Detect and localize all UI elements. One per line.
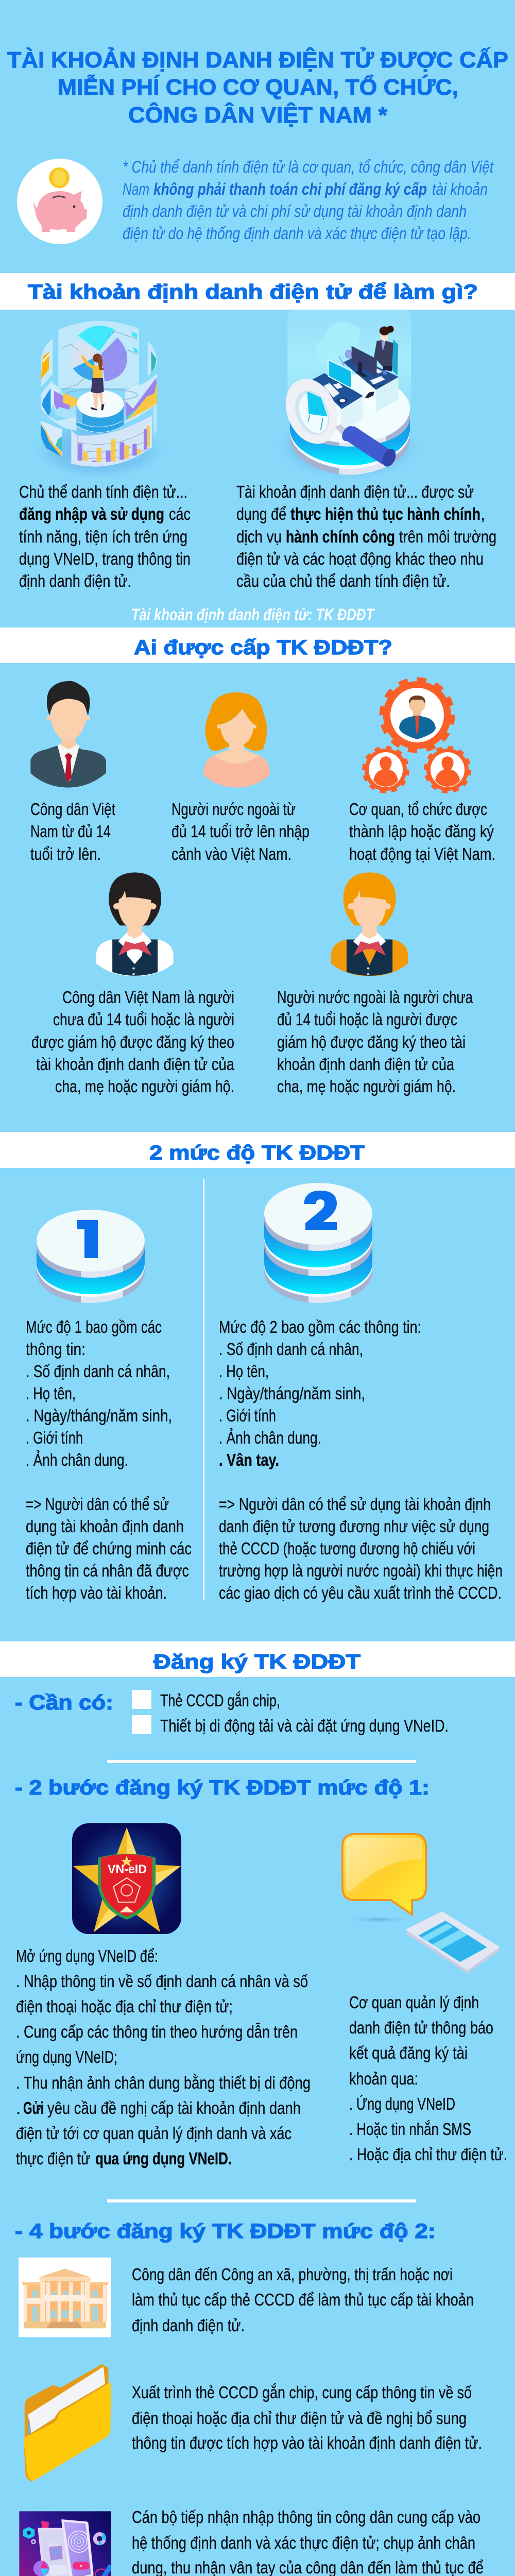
icon: level 1 disc [37, 1210, 145, 1303]
text: foreigners under 14 [277, 988, 473, 1096]
text: foreigners under 14: cha, mẹ hoặc người giám hộ. [277, 1077, 456, 1096]
text: level 1 [26, 1317, 192, 1602]
text: step 1 open app: ứng dụng VNeID; [16, 2047, 117, 2066]
text: citizens under 14: được giám hộ được đăng ký theo [31, 1032, 234, 1052]
text: citizens under 14: Công dân Việt Nam là người [62, 988, 234, 1007]
text: level 2: Mức độ 2 bao gồm các thông tin: [219, 1317, 421, 1336]
text: step 1 open app [16, 1946, 311, 2168]
text: step 2 notification: Cơ quan quản lý định [349, 1993, 479, 2012]
footnote text: không phải thanh toán chi phí đăng ký cấp [153, 180, 427, 198]
text: step 1 open app: Gửi [23, 2098, 44, 2117]
band heading: two levels: 2 mức độ TK ĐDĐT [149, 1142, 365, 1164]
text: level 1: . Ngày/tháng/năm sinh, [26, 1406, 172, 1425]
icon: VN-eID app: VN-eID [108, 1862, 147, 1876]
text: step 1 open app: Mở ứng dụng VNeID để: [16, 1946, 158, 1965]
text: step 2 notification: khoản qua: [349, 2069, 418, 2088]
footnote text: Nam [123, 180, 149, 198]
text: citizens over 14: Nam từ đủ 14 [30, 822, 111, 841]
title [7, 46, 508, 128]
text: level 1: . Họ tên, [26, 1384, 76, 1403]
text: step 1 visit police: định danh điện tử. [132, 2316, 245, 2335]
text: step 1 open app: điện thoại hoặc địa chỉ thư điện tử; [16, 1997, 233, 2016]
text: citizens under 14 [31, 988, 235, 1096]
band heading: what is it for: Tài khoản định danh điện tử để làm gì? [28, 281, 478, 303]
subheading: four steps: - 4 bước đăng ký TK ĐDĐT mức độ 2: [15, 2220, 436, 2243]
text: level 1: . Giới tính [26, 1428, 83, 1447]
band heading: two levels [0, 1132, 515, 1168]
text: step 1 open app: . [16, 2098, 21, 2117]
text: level 1: . Ảnh chân dung. [26, 1450, 128, 1469]
text: step 3 officer input [132, 2507, 484, 2576]
text: foreigners over 14 [171, 800, 310, 863]
icon: organization gears [364, 680, 469, 791]
text: level 1: Mức độ 1 bao gồm các [26, 1317, 162, 1336]
subheading: requirements: - Cần có: [15, 1691, 113, 1714]
text: citizens over 14 [30, 800, 115, 863]
text: step 2 present card [132, 2383, 482, 2452]
checklist: Thẻ CCCD gắn chip, [160, 1691, 280, 1710]
icon: schoolgirl dark hair [96, 872, 174, 976]
subheading: two steps: - 2 bước đăng ký TK ĐDĐT mức độ 1: [15, 1776, 430, 1799]
text: step 1 open app: yêu cầu đề nghị cấp tài khoản định danh [47, 2098, 301, 2117]
icon: VN-eID app [72, 1823, 181, 1934]
text: step 1 open app: . Thu nhận ảnh chân dung bằng thiết bị di động [16, 2073, 311, 2092]
icon: chat bubble and phone [342, 1834, 498, 1972]
text: left use: đăng nhập và sử dụng [19, 504, 164, 523]
text: foreigners under 14: giám hộ được đăng ký theo tài [277, 1032, 466, 1052]
text: level 1: => Người dân có thể sử [26, 1495, 169, 1514]
text: step 1 open app: qua ứng dụng VNeID. [95, 2149, 232, 2168]
illustration: office desks on disc with magnifier [273, 310, 424, 482]
text: citizens under 14: cha, mẹ hoặc người giám hộ. [55, 1077, 234, 1096]
title: CÔNG DÂN VIỆT NAM * [128, 101, 388, 128]
text: level 2: . Vân tay. [219, 1450, 279, 1469]
band heading: who [0, 628, 515, 663]
text: left use [19, 482, 191, 590]
text: citizens under 14: tài khoản định danh điện tử của [36, 1055, 235, 1074]
icon: building [19, 2258, 111, 2337]
text: citizens over 14: tuổi trở lên. [30, 844, 101, 863]
text: left use: các [169, 504, 191, 523]
text: level 2: . Ngày/tháng/năm sinh, [219, 1384, 365, 1403]
text: right use: cầu của chủ thể danh tính điện tử. [236, 571, 450, 590]
title: TÀI KHOẢN ĐỊNH DANH ĐIỆN TỬ ĐƯỢC CẤP [7, 46, 508, 73]
text: level 1: . Số định danh cá nhân, [26, 1362, 170, 1381]
text: step 2 notification [349, 1993, 507, 2164]
text: level 1: dụng tài khoản định danh [26, 1517, 184, 1536]
band heading: what is it for [0, 273, 515, 310]
text: step 1 visit police [132, 2265, 474, 2335]
text: right use: hành chính công [286, 527, 395, 546]
text: right use [236, 482, 496, 590]
text: step 1 open app: . Cung cấp các thông tin theo hướng dẫn trên [16, 2022, 298, 2041]
title: MIỄN PHÍ CHO CƠ QUAN, TỔ CHỨC, [58, 74, 458, 100]
band heading: register [0, 1641, 515, 1677]
text: foreigners over 14: đủ 14 tuổi trở lên nhập [171, 822, 310, 841]
text: level 1: tích hợp vào tài khoản. [26, 1583, 167, 1602]
checklist [132, 1690, 449, 1735]
checklist: Thiết bị di động tải và cài đặt ứng dụng VNeID. [160, 1716, 449, 1735]
band heading: who: Ai được cấp TK ĐDĐT? [134, 636, 392, 659]
text: foreigners over 14: cảnh vào Việt Nam. [171, 844, 291, 863]
illustration: woman with data charts [31, 321, 168, 481]
icon: folder [24, 2364, 111, 2481]
icon: schoolgirl orange hair [331, 872, 408, 976]
text: step 1 open app: điện tử tới cơ quan quản lý định danh và xác [16, 2124, 291, 2143]
caption: abbreviation: Tài khoản định danh điện tử: TK ĐDĐT [131, 605, 375, 624]
band heading: register: Đăng ký TK ĐDĐT [153, 1651, 360, 1673]
icon: fingerprint phone: » [80, 2563, 82, 2568]
text: step 2 notification: . Hoặc tin nhắn SMS [349, 2120, 471, 2139]
text: step 2 notification: . Ứng dụng VNeID [349, 2094, 455, 2113]
text: level 1: thông tin: [26, 1340, 85, 1359]
icon: piggy bank [17, 159, 102, 244]
text: level 1: thông tin cá nhân đã được [26, 1561, 189, 1580]
text: organizations [349, 800, 495, 863]
text: foreigners over 14: Người nước ngoài từ [171, 800, 296, 819]
text: left use: Chủ thể danh tính điện tử... [19, 482, 187, 501]
text: left use: dụng VNeID, trang thông tin [19, 549, 191, 568]
text: level 1: điện tử để chứng minh các [26, 1539, 192, 1558]
text: right use: dịch vụ [236, 527, 282, 546]
text: left use: tính năng, tiện ích trên ứng [19, 527, 187, 546]
text: level 2: . Ảnh chân dung. [219, 1428, 321, 1447]
text: right use: , [480, 504, 485, 523]
icon: level 2 disc [264, 1183, 372, 1303]
icon: fingerprint phone [19, 2511, 111, 2576]
text: level 2 [219, 1317, 503, 1602]
column divider [203, 1179, 204, 1600]
text: step 1 open app: . Nhập thông tin về số định danh cá nhân và số [16, 1972, 308, 1991]
text: step 2 notification: kết quả đăng ký tài [349, 2043, 468, 2062]
text: step 1 open app: thực điện tử [16, 2149, 90, 2168]
text: level 2: . Giới tính [219, 1406, 276, 1425]
text: right use: trên môi trường [399, 527, 496, 546]
footnote text [123, 158, 494, 243]
icon: man [30, 681, 106, 788]
text: level 2: . Họ tên, [219, 1362, 269, 1381]
icon: woman [203, 692, 270, 788]
text: foreigners under 14: đủ 14 tuổi hoặc là người được [277, 1010, 457, 1029]
text: right use: dụng để [236, 504, 286, 523]
text: citizens over 14: Công dân Việt [30, 800, 115, 819]
text: foreigners under 14: khoản định danh điện tử của [277, 1055, 455, 1074]
footnote text: tài khoản [432, 180, 488, 198]
text: level 2: . Số định danh cá nhân, [219, 1340, 363, 1359]
text: left use: định danh điện tử. [19, 571, 131, 590]
text: citizens under 14: chưa đủ 14 tuổi hoặc là người [53, 1010, 234, 1029]
